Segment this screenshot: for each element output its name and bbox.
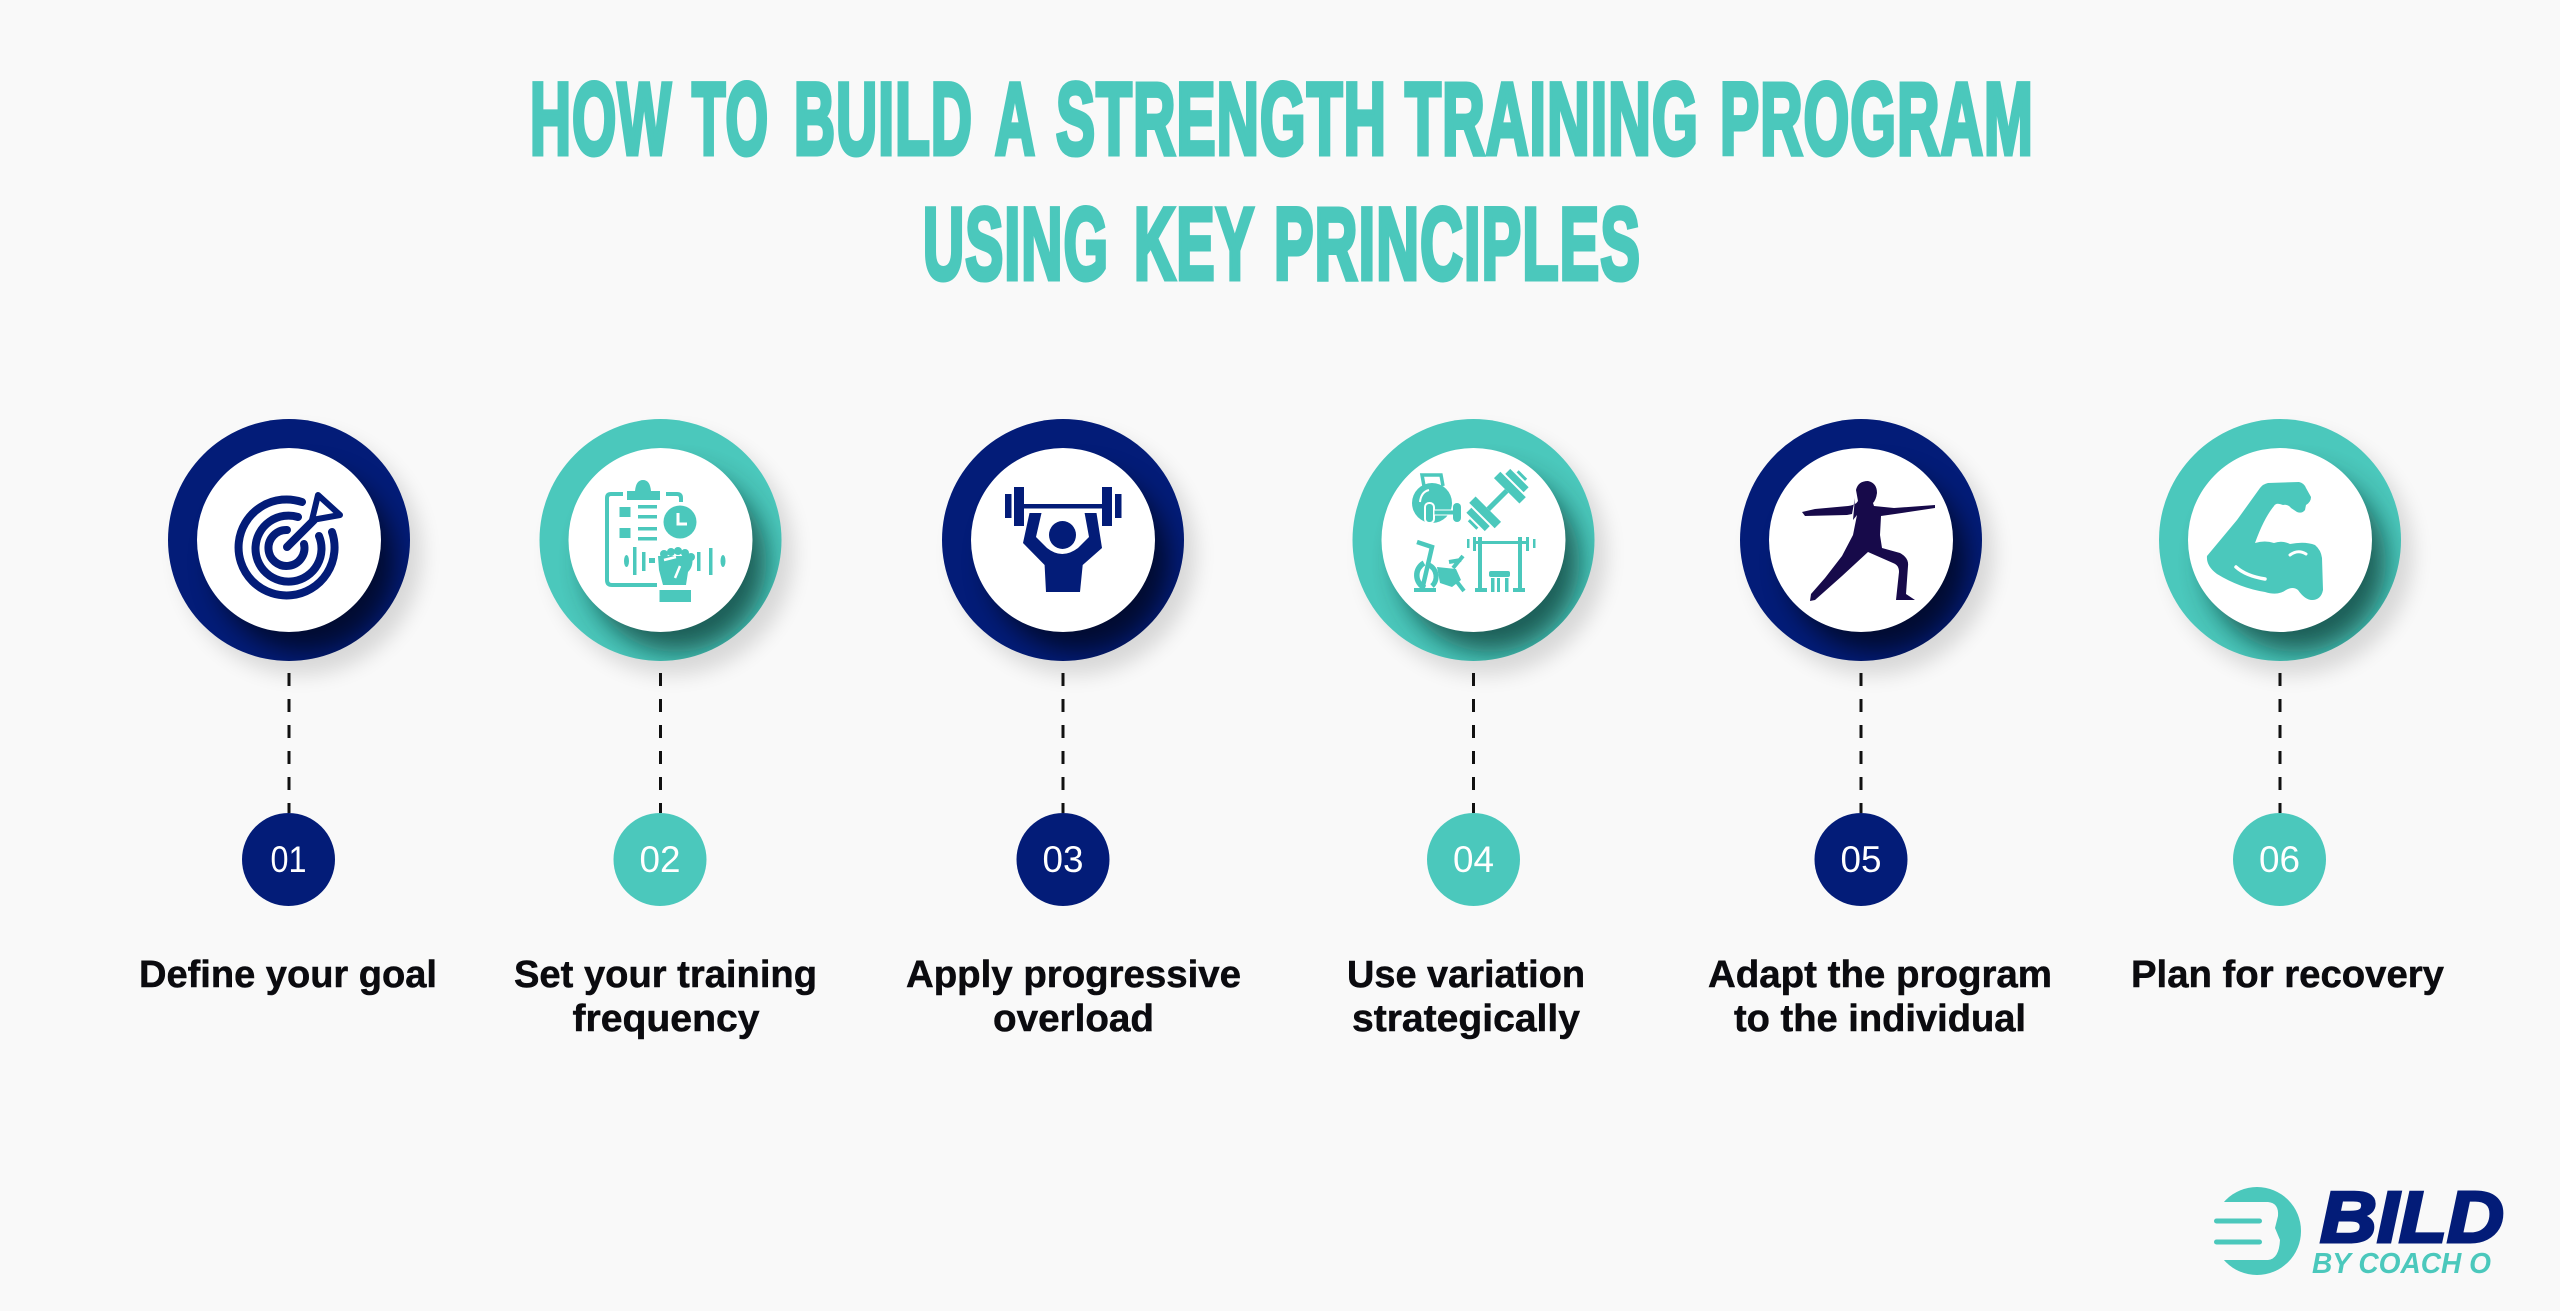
step 2: set your training frequency [514,419,817,1040]
number badge 04: 04 [1453,839,1494,880]
icon circle 3 [942,419,1196,675]
number badge 01 [242,813,335,906]
title: TRAINING [1405,62,1699,176]
label 5: to the individual [1734,998,2026,1040]
step 5: adapt the program to the individual [1708,419,2052,1040]
title: HOW [530,62,672,176]
title: STRENGTH [1056,62,1387,176]
dashed connector 5 [1860,673,1862,813]
label 4: strategically [1352,998,1580,1040]
title: PRINCIPLES [1274,187,1641,301]
dashed connector 2 [659,673,662,813]
step 3: apply progressive overload [906,419,1241,1040]
title: USING [923,187,1109,301]
label 6: Plan for recovery [2131,954,2444,996]
title: A [995,62,1036,176]
number badge 03 [1016,813,1110,906]
label 3: Apply progressive [906,954,1241,996]
step 6: plan for recovery [2131,419,2444,996]
title [530,62,2034,301]
dashed connector 6 [2278,673,2282,813]
icon circle 4 [1352,419,1606,675]
icon circle 5 [1740,419,1994,675]
dashed connector 3 [1062,673,1064,813]
title: TO [692,62,769,176]
logo mark [2213,1187,2301,1275]
icon: yoga warrior pose [1802,481,1935,601]
number badge 06 [2233,813,2326,906]
title: BUILD [794,62,973,176]
icon: target with arrow [239,495,340,595]
step 1: define your goal [139,419,437,996]
dashed connector 4 [1472,673,1475,813]
label 4: Use variation [1347,954,1585,996]
number badge 02 [614,813,706,906]
number badge 05: 05 [1840,839,1882,880]
label 1: Define your goal [139,954,437,996]
number badge 05 [1814,813,1908,906]
icon: weightlifter [1005,487,1122,592]
label 2 [514,954,817,1040]
step 4: use variation strategically [1347,419,1606,1040]
icon: flexed bicep [2207,482,2323,600]
label 2: Set your training [514,954,817,996]
label 5 [1708,954,2052,1040]
number badge 01: 01 [270,839,306,880]
icon circle 6 [2159,419,2413,675]
number badge 03: 03 [1042,839,1084,880]
icon circle 1 [168,419,422,675]
number badge 02: 02 [640,839,680,880]
icon circle 2 [540,419,794,675]
icon: gym equipment [1412,462,1536,592]
title: KEY [1134,187,1255,301]
label 5: Adapt the program [1708,954,2052,996]
number badge 06: 06 [2259,839,2300,880]
label 2: frequency [572,998,760,1040]
label 3: overload [993,998,1154,1040]
title: PROGRAM [1720,62,2034,176]
number badge 04 [1427,813,1520,906]
icon: clipboard, clock and dumbbell fist [607,480,726,602]
label 3 [906,954,1241,1040]
label 4 [1347,954,1585,1040]
logo tagline: BY COACH O [2312,1248,2491,1280]
dashed connector 1 [288,673,290,813]
logo wordmark: BILD [2320,1178,2504,1258]
logo: BILD by Coach O [2213,1178,2504,1280]
